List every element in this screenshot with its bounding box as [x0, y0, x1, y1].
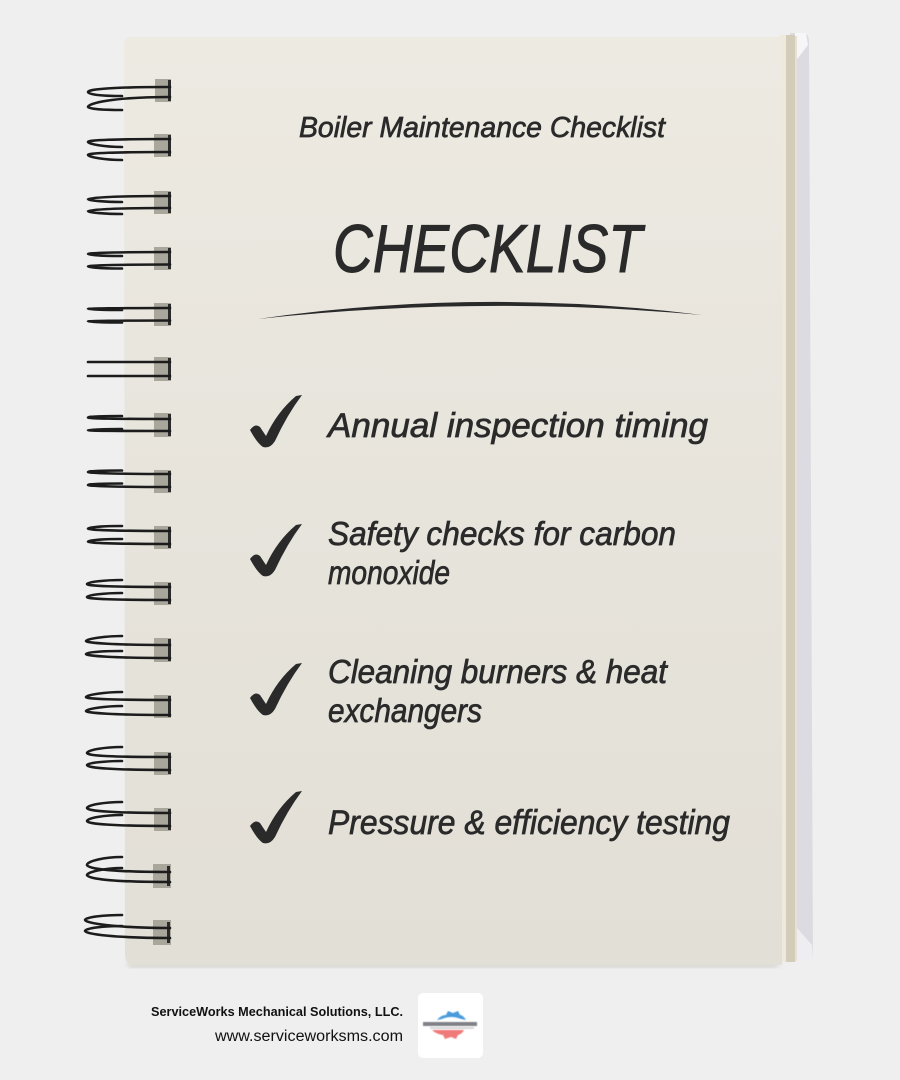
checklist item 2 [250, 515, 685, 591]
title: CHECKLIST [333, 211, 646, 287]
front page [124, 37, 782, 965]
logo tagline bar [430, 1027, 474, 1029]
logo [418, 993, 483, 1058]
item text: Annual inspection timing [326, 407, 708, 445]
footer company name: ServiceWorks Mechanical Solutions, LLC. [151, 1004, 403, 1019]
cover corner: bottom [797, 928, 813, 960]
cover corner: top [795, 33, 808, 62]
logo gear bottom [432, 1030, 464, 1039]
checklist item 1 [250, 395, 708, 447]
page stack [780, 35, 797, 962]
subtitle: Boiler Maintenance Checklist [299, 112, 667, 144]
item text: monoxide [328, 554, 450, 591]
icon: check mark [250, 524, 302, 576]
icon: check mark [250, 791, 302, 843]
checklist item 3 [250, 653, 676, 729]
logo wordmark bar [423, 1022, 477, 1026]
back cover [790, 33, 813, 960]
item text: Cleaning burners & heat [328, 653, 669, 690]
checklist item 4 [250, 791, 730, 843]
item text: Pressure & efficiency testing [328, 804, 730, 842]
footer website: www.serviceworksms.com [214, 1028, 403, 1045]
item text: Safety checks for carbon [328, 515, 676, 552]
icon: check mark [250, 395, 302, 447]
icon: check mark [250, 663, 302, 715]
spiral binding [85, 79, 171, 945]
notebook [124, 33, 813, 968]
page shadow [128, 960, 778, 968]
logo gear top [437, 1011, 466, 1020]
title underline [258, 302, 702, 319]
item text: exchangers [328, 692, 482, 729]
